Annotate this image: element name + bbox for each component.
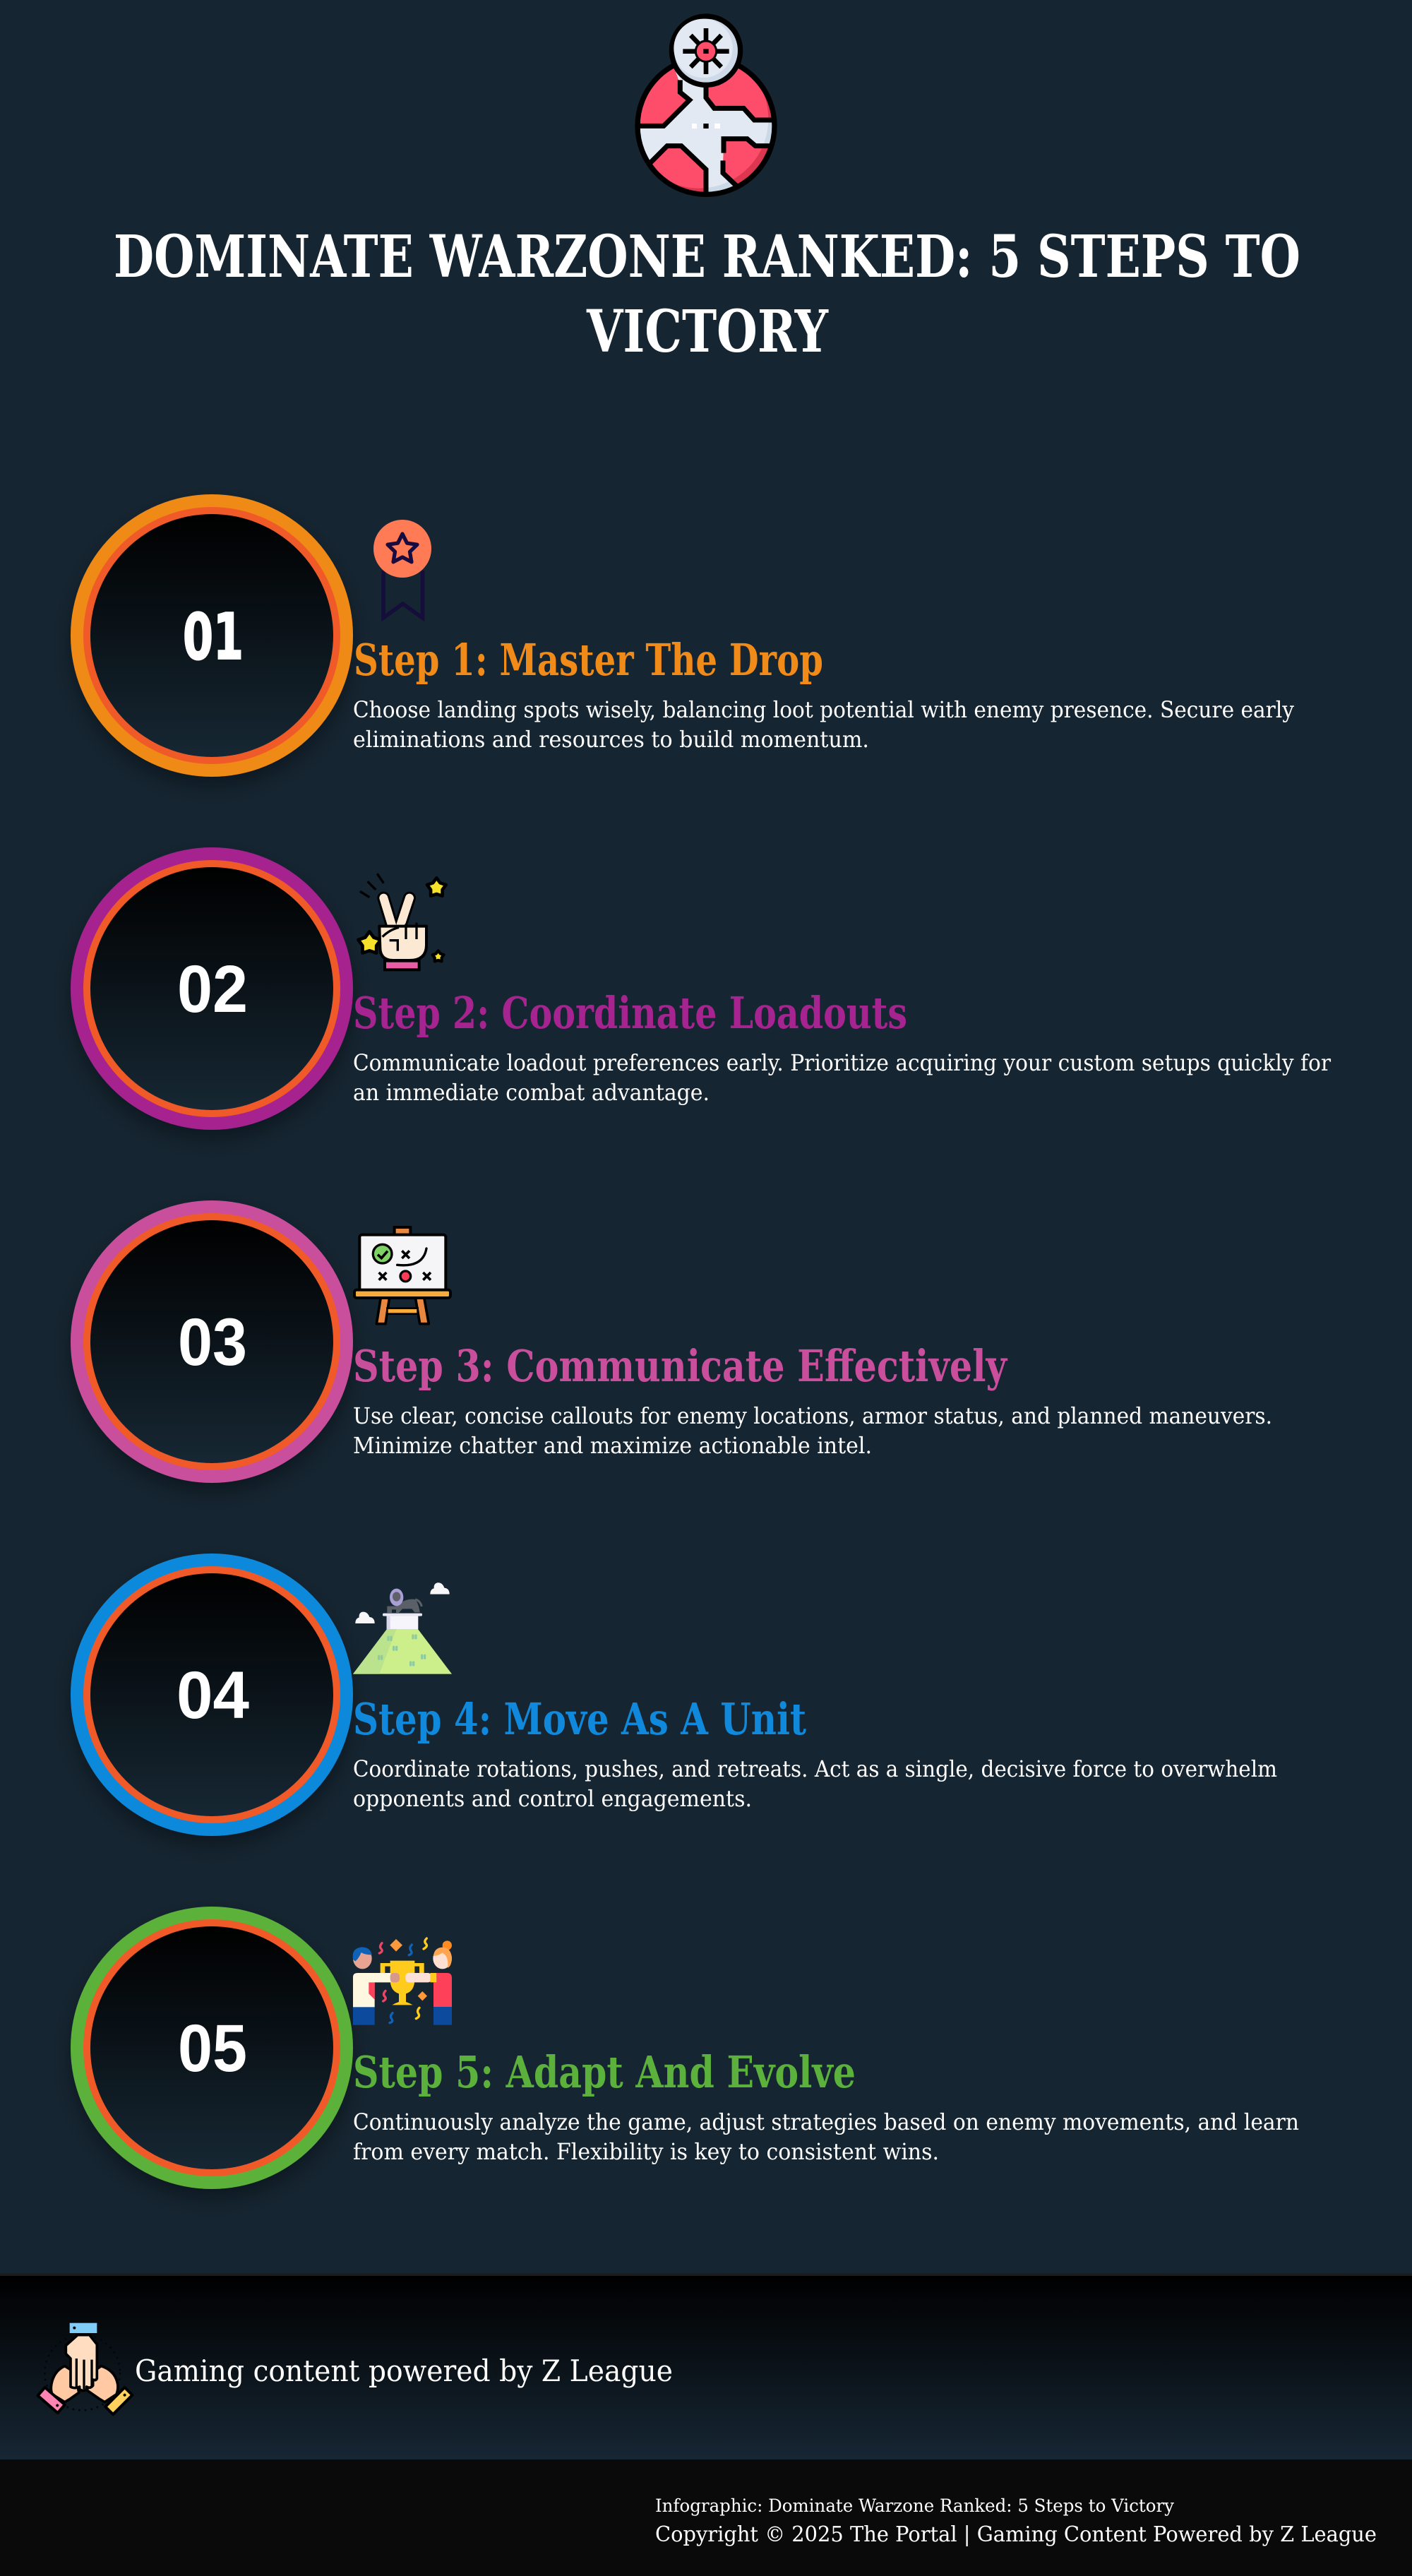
text: step 5 description	[353, 2109, 1299, 2165]
number circle 03: 03	[178, 1305, 247, 1380]
panel: step 1	[71, 494, 1294, 777]
heading: step 4: Step 4: Move As A Unit	[353, 1693, 806, 1745]
text: infographic title: Infographic: Dominate Warzone Ranked: 5 Steps to Victory	[655, 2496, 1175, 2516]
text: step 1 description	[353, 696, 1294, 753]
panel: step 3	[71, 1200, 1272, 1483]
icon: strategy board on easel	[354, 1227, 450, 1324]
text: powered by: Gaming content powered by Z League	[135, 2354, 673, 2388]
icon: peace hand with stars	[358, 873, 446, 970]
text: step 5 description: from every match. Flexibility is key to consistent wins.	[353, 2138, 939, 2165]
panel: footer	[0, 2459, 1412, 2576]
text: step 4 description: Coordinate rotations, pushes, and retreats. Act as a single, decisive force to overwhelm	[353, 1755, 1277, 1782]
icon: hill with statue and clouds	[353, 1582, 452, 1674]
text: step 4 description: opponents and control engagements.	[353, 1785, 752, 1812]
heading: step 1: Step 1: Master The Drop	[354, 634, 823, 686]
number circle 02	[71, 847, 353, 1130]
text: step 1 description: eliminations and resources to build momentum.	[353, 726, 869, 753]
icon: teammates holding a trophy	[353, 1938, 452, 2025]
text: copyright: Copyright © 2025 The Portal | Gaming Content Powered by Z League	[655, 2522, 1377, 2547]
text: step 1 description: Choose landing spots wisely, balancing loot potential with enemy presence. Secure early	[353, 696, 1294, 723]
text: step 2 description: Communicate loadout preferences early. Prioritize acquiring your custom setups quickly for	[353, 1049, 1332, 1076]
number circle 01: 01	[183, 600, 244, 674]
text: step 4 description	[353, 1755, 1277, 1812]
icon: three hands together	[38, 2323, 132, 2414]
number circle 03	[71, 1200, 353, 1483]
panel: step 5	[71, 1907, 1299, 2189]
text: step 2 description	[353, 1049, 1332, 1106]
heading: step 5: Step 5: Adapt And Evolve	[353, 2046, 856, 2098]
icon: cracked globe with virus	[630, 16, 777, 196]
text: step 3 description: Use clear, concise callouts for enemy locations, armor status, and planned maneuvers.	[353, 1402, 1272, 1429]
number circle 04	[71, 1554, 353, 1836]
panel: step 2	[71, 847, 1332, 1130]
number circle 01	[71, 494, 353, 777]
title	[114, 223, 1300, 366]
text: step 2 description: an immediate combat advantage.	[353, 1079, 710, 1106]
number circle 05	[71, 1907, 353, 2189]
heading: step 2: Step 2: Coordinate Loadouts	[353, 987, 907, 1039]
heading: step 3: Step 3: Communicate Effectively	[353, 1340, 1008, 1392]
number circle 02: 02	[177, 952, 248, 1027]
number circle 05: 05	[178, 2011, 247, 2086]
panel: sponsor band	[0, 2273, 1412, 2459]
title: VICTORY	[586, 298, 829, 366]
number circle 04: 04	[176, 1658, 249, 1733]
text: step 3 description: Minimize chatter and maximize actionable intel.	[353, 1432, 872, 1459]
panel: step 4	[71, 1554, 1277, 1836]
text: step 3 description	[353, 1402, 1272, 1459]
text: step 5 description: Continuously analyze the game, adjust strategies based on enemy movements, and learn	[353, 2109, 1299, 2135]
icon: medal with star	[373, 520, 431, 618]
